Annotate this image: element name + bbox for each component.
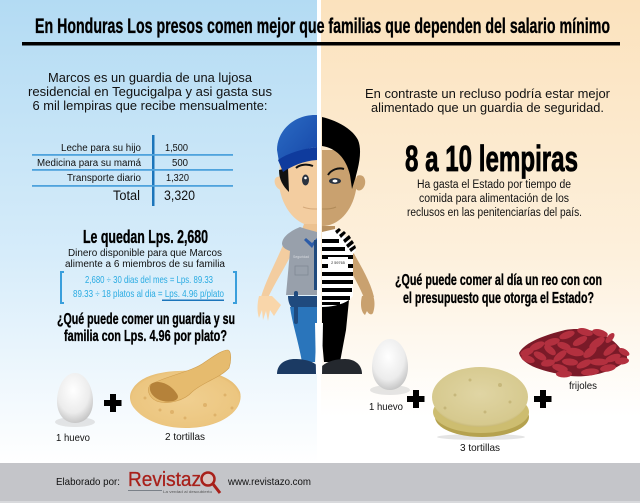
icon: egg right (370, 339, 410, 395)
heading: prisoner question (395, 272, 602, 307)
character: prisoner half: 2 59765 (331, 261, 345, 265)
text block: available money: Dinero disponible para que Marcos (68, 248, 222, 259)
text block: state spending: comida para alimentación de los (419, 193, 569, 205)
text block: state spending: Ha gasta el Estado por tiempo de (417, 179, 571, 191)
expense table: 3,320 (164, 188, 195, 203)
expense table: Medicina para su mamá (37, 158, 141, 169)
legs gap notch (315, 323, 323, 374)
panel: prisoner side background (320, 0, 640, 463)
icon: egg left (55, 373, 95, 427)
icon: red beans (519, 327, 631, 378)
text block: guard intro: 6 mil lempiras que recibe mensualmente: (32, 99, 268, 113)
logo: Revistazo: La verdad al descubierto (163, 489, 213, 494)
label: 1 huevo right: 1 huevo (369, 401, 403, 413)
character: prisoner half (322, 117, 374, 374)
text block: state spending: reclusos en las penitenciarías del país. (407, 207, 582, 219)
center divider (317, 0, 321, 463)
text block: prisoner intro: En contraste un recluso podría estar mejor (365, 87, 610, 101)
text block: available money: alimente a 6 miembros de su familia (65, 259, 225, 270)
label: 3 tortillas: 3 tortillas (460, 442, 500, 454)
expense table: 500 (172, 158, 188, 169)
text block: guard intro: residencial en Tegucigalpa y asi gasta sus (28, 85, 272, 99)
icon: plus right one (407, 390, 424, 408)
text block: prisoner intro (365, 87, 610, 115)
expense table: 1,500 (165, 143, 188, 154)
label: 2 tortillas: 2 tortillas (165, 431, 205, 443)
calculation bracket: 2,680 ÷ 30 dias del mes = Lps. 89.33 (85, 274, 213, 286)
text block: available money (65, 248, 225, 270)
label: frijoles: frijoles (569, 380, 597, 392)
footer credit label: Elaborado por: (56, 476, 120, 488)
footer website: www.revistazo.com (227, 476, 311, 488)
character: guard half (258, 115, 317, 374)
footer band (0, 463, 640, 503)
text block: state spending (407, 179, 582, 219)
icon: plus right two (534, 390, 552, 408)
expense table: Leche para su hijo (61, 143, 141, 154)
heading: guard question: ¿Qué puede comer un guardia y su (57, 311, 235, 328)
calculation bracket (61, 272, 236, 303)
label: 1 huevo: 1 huevo (56, 432, 90, 444)
text block: guard intro (28, 71, 272, 113)
icon: rolled tortilla (130, 350, 241, 428)
heading: guard question (57, 311, 235, 345)
text block: guard intro: Marcos es un guardia de una lujosa (48, 71, 252, 85)
expense table: 1,320 (166, 173, 189, 184)
expense table: Total (113, 188, 140, 203)
expense table (32, 135, 233, 206)
text block: prisoner intro: alimentado que un guardia de seguridad. (371, 101, 604, 115)
heading: guard question: familia con Lps. 4.96 por plato? (64, 328, 227, 345)
panel: guard side background (0, 0, 318, 463)
expense table: Transporte diario (67, 173, 141, 184)
calculation bracket: 89.33 ÷ 18 platos al dia = Lps. 4.96 p/plato (73, 288, 224, 300)
icon: plus left (104, 394, 122, 412)
icon: stacked tortillas (432, 367, 529, 440)
character: guard half: Seguridad (293, 255, 309, 259)
heading: remaining money: Le quedan Lps. 2,680 (83, 227, 208, 247)
logo: Revistazo: Revistaz (128, 469, 201, 491)
